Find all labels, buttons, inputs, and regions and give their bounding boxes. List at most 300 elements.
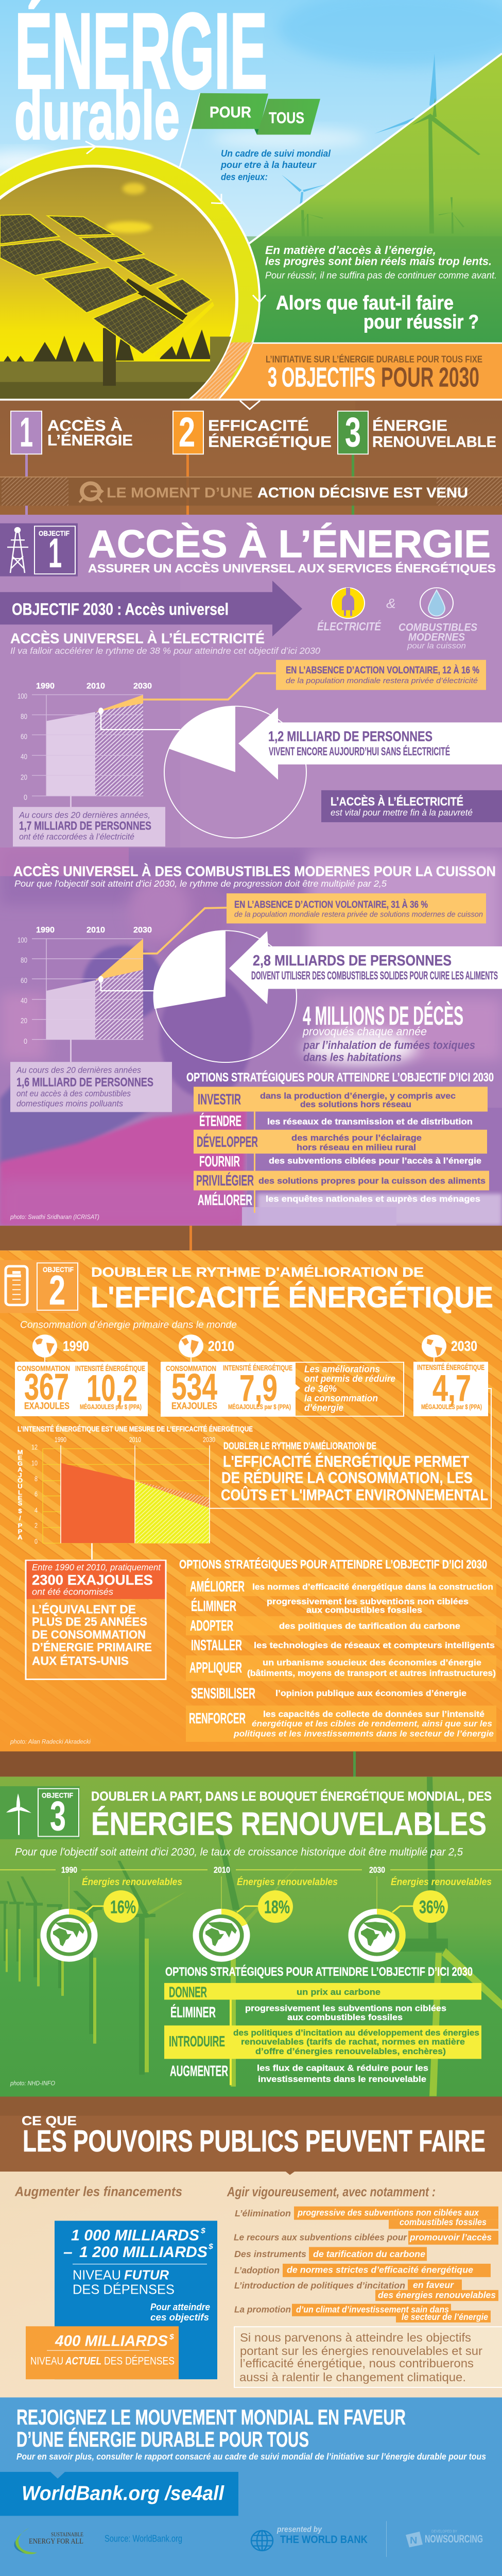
icon: field turbines	[301, 98, 480, 236]
chart: cooking fuels: 20	[21, 1017, 27, 1025]
panel: footer	[0, 2397, 502, 2576]
box: url	[0, 2472, 238, 2516]
table: objective 2 strategies: les technologies de réseaux et compteurs intelligents	[254, 1640, 495, 1650]
table: objective 1 strategies: AMÉLIORER	[198, 1192, 252, 1209]
box: future spending: NIVEAU	[73, 2267, 121, 2282]
label: electricity: ÉLECTRICITÉ	[317, 619, 381, 633]
icon: ring arrows	[85, 141, 266, 302]
year 2010: INTENSITÉ ÉNERGÉTIQUE	[223, 1364, 292, 1372]
strip: decisive moment	[0, 477, 502, 505]
objective 3 tag	[338, 409, 496, 455]
table: objective 1 strategies: hors réseau en milieu rural	[297, 1142, 416, 1152]
panel: three objectives on wood	[0, 401, 502, 515]
label: modern fuels	[399, 621, 477, 650]
timeline: 2030	[369, 1865, 385, 1875]
chart: energy intensity: $	[18, 1507, 22, 1515]
chart: energy intensity: 12	[31, 1444, 38, 1452]
box: 1.6 billion: 1,6 MILLIARD DE PERSONNES	[16, 1075, 153, 1089]
icon: plug	[332, 588, 365, 618]
chart: energy intensity: O	[18, 1477, 23, 1484]
list: actions: d’un climat d’investissement sain dans	[296, 2304, 449, 2314]
list: actions: de normes strictes d’efficacité énergétique	[287, 2264, 473, 2275]
box: electricity vital: est vital pour mettre fin à la pauvreté	[331, 807, 473, 818]
table: objective 3 strategies	[164, 1964, 481, 2085]
chart: cooking fuels: 2030	[133, 926, 152, 935]
table: objective 1 strategies: INVESTIR	[198, 1092, 241, 1108]
headings	[14, 2184, 436, 2199]
box: url: WorldBank.org /se4all	[22, 2482, 224, 2504]
source: Source: WorldBank.org	[105, 2534, 182, 2544]
badge: objective 1: 1	[48, 530, 62, 576]
icon: target	[79, 483, 102, 502]
panel: cooking fuels with photo	[0, 848, 502, 1226]
flag: pour tous: TOUS	[269, 109, 304, 127]
icon: pylon	[7, 528, 28, 573]
table: objective 2 strategies	[179, 1557, 496, 1742]
year 2030: 4,7	[432, 1367, 471, 1409]
chart: energy intensity: 6	[34, 1490, 38, 1498]
label: modern fuels: pour la cuisson	[407, 641, 466, 650]
box: future spending: 1 000 MILLIARDS	[71, 2227, 199, 2244]
box: exajoules saved: ont été économisés	[32, 1586, 113, 1597]
box: 1.7 billion	[13, 807, 165, 846]
heading: join the movement: D’UNE ÉNERGIE DURABLE POUR TOUS	[16, 2428, 309, 2451]
table: objective 3 strategies: renouvelables (tarifs de rachat, normes en matière	[241, 2037, 465, 2046]
objective 1 tag: ACCÈS À	[47, 417, 123, 434]
year 2010: 534	[171, 1366, 217, 1408]
panel: what governments can do heading	[0, 2097, 502, 2172]
box: exajoules saved: AUX ÉTATS-UNIS	[32, 1654, 129, 1668]
heading: 3 objectives: 3 OBJECTIFS	[268, 362, 375, 393]
logo: world bank	[251, 2525, 368, 2551]
list: actions: Des instruments	[234, 2249, 306, 2259]
badge: objective 2: 2	[49, 1267, 65, 1313]
timeline: 2010	[214, 1865, 230, 1875]
chart: cooking fuels: 60	[21, 977, 27, 985]
table: objective 1 strategies: des marchés pour l’éclairage	[291, 1133, 422, 1143]
chart: cooking fuels	[18, 926, 154, 1062]
stat: 4 million deaths: provoqués chaque année	[302, 1025, 427, 1038]
table: objective 3 strategies: progressivement les subventions non ciblées	[245, 2003, 446, 2013]
chart: electricity access: 60	[21, 733, 27, 741]
year 2010: 2010	[208, 1338, 234, 1354]
callout: 2.8 billion	[229, 931, 502, 1004]
table: objective 3 strategies: ÉLIMINER	[170, 2004, 216, 2021]
year 2010: EXAJOULES	[171, 1401, 217, 1412]
year 2010: CONSOMMATION	[166, 1364, 216, 1373]
chart: electricity access: 100	[18, 692, 27, 701]
green diagonal panel	[206, 54, 502, 343]
box: future spending: DES DÉPENSES	[73, 2282, 175, 2297]
box: future spending: 1 200 MILLIARDS	[79, 2243, 207, 2261]
year 1990: MÉGAJOULES par $ (PPA)	[80, 1403, 142, 1411]
yellow ring and photo	[0, 145, 261, 399]
box: electricity vital: L’ACCÈS À L’ÉLECTRICITÉ	[331, 794, 463, 808]
box: 1.6 billion: domestiques moins polluants	[16, 1098, 123, 1108]
table: objective 2 strategies: un urbanisme soucieux des économies d’énergie	[263, 1657, 481, 1667]
flag: pour tous	[192, 93, 320, 134]
box: 1.6 billion	[10, 1062, 172, 1112]
chart: energy intensity	[18, 1425, 253, 1560]
objective 1 tag: 1	[20, 409, 33, 455]
notch	[286, 2172, 295, 2175]
callout: 1.2 billion: 1,2 MILLIARD DE PERSONNES	[268, 728, 432, 744]
chart: energy intensity: L	[18, 1489, 22, 1496]
panel: what governments can do heading: CE QUE	[22, 2113, 77, 2128]
box: current spending: DES DÉPENSES	[104, 2354, 175, 2367]
year 2030: 2030	[451, 1338, 477, 1354]
heading: objective 2	[20, 1264, 493, 1330]
logo: world bank: presented by	[276, 2525, 322, 2534]
wood band 3	[0, 1751, 502, 1777]
table: objective 2 strategies: énergétique et les cibles de rendement, ainsi que sur les	[252, 1719, 492, 1728]
callout: no action electricity: de la population mondiale restera privée d’électricité	[286, 677, 478, 685]
logo: sustainable energy for all	[14, 2528, 83, 2554]
chart: cooking fuels: 2010	[86, 926, 105, 935]
table: objective 3 strategies: d’offre d’énergies renouvelables, enchères)	[255, 2046, 446, 2056]
text: doubling statement: DOUBLER LE RYTHME D'AMÉLIORATION DE	[223, 1440, 376, 1452]
chart: energy intensity: 8	[34, 1475, 38, 1483]
chart: electricity access: 0	[24, 793, 27, 802]
box: current spending: 400 MILLIARDS	[55, 2332, 168, 2349]
chart: energy intensity: /	[19, 1515, 21, 1522]
table: objective 2 strategies: RENFORCER	[189, 1710, 246, 1726]
callout: no action cooking: EN L’ABSENCE D’ACTION VOLONTAIRE, 31 À 36 %	[234, 899, 428, 910]
chart: energy intensity: S	[18, 1500, 22, 1507]
chart: energy intensity: 2030	[203, 1436, 215, 1444]
box: 1.6 billion: Au cours des 20 dernières années	[16, 1065, 141, 1075]
year 1990	[15, 1334, 148, 1416]
table: objective 3 strategies: DONNER	[169, 1985, 207, 2001]
list: actions: Le recours aux subventions ciblées pour	[234, 2232, 407, 2242]
list: actions: La promotion	[234, 2304, 291, 2314]
chart: electricity access: 2010	[86, 682, 105, 690]
ampersand: &	[386, 596, 396, 611]
panel: actions on paper	[0, 2172, 502, 2397]
photo credit: photo: Alan Radecki Akradecki	[10, 1738, 91, 1745]
box: 1.7 billion: 1,7 MILLIARD DE PERSONNES	[19, 820, 151, 833]
heading: question	[276, 292, 479, 333]
year 2010: 7,9	[239, 1367, 278, 1409]
table: objective 2 strategies: politiques et les investissements dans le secteur de l’énergie	[233, 1728, 494, 1739]
strip: decisive moment: ACTION DÉCISIVE EST VENU	[257, 484, 468, 501]
text: progress statement: En matière d’accès à l’énergie,	[265, 244, 436, 257]
subtitle: Un cadre de suivi mondial	[221, 149, 331, 159]
table: objective 1 strategies: DÉVELOPPER	[197, 1133, 258, 1150]
year 2010	[161, 1334, 404, 1417]
box: 1.7 billion: ont été raccordées à l’électricité	[19, 832, 134, 841]
table: objective 2 strategies: les capacités de collecte de données sur l’intensité	[263, 1709, 484, 1719]
chart: energy intensity: 10	[31, 1460, 38, 1467]
list: actions: L’introduction de politiques d’incitation	[234, 2280, 405, 2291]
panel: objective 3	[0, 1777, 502, 2097]
logo: sustainable energy for all: SUSTAINABLE	[51, 2531, 83, 2538]
year 2010: d’énergie	[304, 1403, 343, 1413]
stat: 18 percent	[196, 1876, 338, 1959]
table: objective 2 strategies: les normes d’efficacité énergétique dans la construction	[252, 1582, 493, 1591]
title	[14, 0, 267, 154]
objective 3 tag: ÉNERGIE	[372, 417, 447, 434]
chart: energy intensity: E	[18, 1495, 22, 1502]
chart: cooking fuels: 40	[21, 997, 27, 1005]
box: exajoules saved: D’ÉNERGIE PRIMAIRE	[32, 1640, 152, 1654]
table: objective 1 strategies: dans la production d’énergie, y compris avec	[260, 1091, 456, 1100]
chart: energy intensity: 0	[34, 1538, 38, 1546]
solar panel photo	[0, 181, 231, 399]
chart: energy intensity: A	[18, 1534, 23, 1541]
connector: doubling box	[210, 1388, 491, 1509]
year 2010: de 36%	[304, 1384, 337, 1394]
year 1990: 10,2	[86, 1367, 137, 1409]
year 2010: la consommation	[304, 1394, 378, 1404]
box: future spending: –	[63, 2243, 73, 2261]
table: objective 3 strategies: AUGMENTER	[170, 2063, 228, 2079]
flag: pour tous: POUR	[210, 103, 251, 121]
table: objective 2 strategies: INSTALLER	[191, 1637, 242, 1654]
chart: energy intensity: M	[18, 1449, 23, 1456]
badge: objective 3	[0, 1786, 80, 1839]
table: objective 2 strategies: ÉLIMINER	[191, 1598, 236, 1615]
chart: electricity access: 20	[21, 773, 27, 782]
heading: objective 3	[15, 1789, 492, 1858]
table: objective 3 strategies: INTRODUIRE	[169, 2033, 225, 2050]
trees	[4, 330, 231, 365]
chart: energy intensity: P	[18, 1522, 22, 1530]
box: exajoules saved: 2300 EXAJOULES	[32, 1572, 153, 1588]
year 2010: MÉGAJOULES par $ (PPA)	[228, 1403, 291, 1411]
box: current spending: $	[169, 2333, 174, 2341]
box: exajoules saved: L’ÉQUIVALENT DE	[32, 1602, 136, 1616]
year 1990: EXAJOULES	[24, 1401, 70, 1412]
objective 1 tag	[11, 409, 133, 455]
box: climate statement: portant sur les énergies renouvelables et sur	[240, 2345, 482, 2358]
table: objective 1 strategies: les enquêtes nationales et auprès des ménages	[266, 1194, 480, 1204]
stat: 18 percent: 18%	[264, 1897, 290, 1917]
heading: objective 1: ACCÈS À L’ÉNERGIE	[88, 522, 491, 566]
heading: cooking fuels: Pour que l'objectif soit atteint d'ici 2030, le rythme de progression doit être multiplié par 2,5	[14, 878, 387, 889]
heading: electricity access: ACCÈS UNIVERSEL À L’ÉLECTRICITÉ	[10, 630, 265, 647]
notch	[240, 401, 260, 409]
stat: 18 percent: Énergies renouvelables	[237, 1876, 338, 1888]
badge: objective 1	[0, 523, 78, 577]
table: objective 2 strategies: (bâtiments, moyens de transport et autres infrastructures)	[247, 1668, 496, 1678]
table: objective 1 strategies: ÉTENDRE	[199, 1112, 241, 1129]
table: objective 2 strategies: APPLIQUER	[189, 1660, 242, 1676]
chart: electricity access: 2030	[133, 682, 152, 690]
table: objective 1 strategies	[186, 1070, 494, 1213]
text: progress statement	[265, 244, 497, 281]
table: objective 1 strategies: PRIVILÉGIER	[196, 1172, 254, 1189]
icon: meter	[6, 1266, 27, 1305]
label: modern fuels: COMBUSTIBLES	[399, 621, 477, 633]
heading: join the movement	[16, 2406, 486, 2462]
year 1990: INTENSITÉ ÉNERGÉTIQUE	[75, 1364, 145, 1373]
chart: electricity access: 40	[21, 753, 27, 761]
heading: objective 2: Consommation d’énergie primaire dans le monde	[20, 1319, 237, 1330]
table: objective 1 strategies: FOURNIR	[199, 1154, 240, 1170]
objective 1 tag: L’ÉNERGIE	[47, 432, 133, 449]
flag pole	[179, 93, 200, 169]
box: exajoules saved: PLUS DE 25 ANNÉES	[32, 1615, 147, 1629]
objective 2 tag: 2	[179, 409, 195, 455]
wood band 2	[0, 1226, 502, 1250]
objective 3 tag: 3	[345, 409, 361, 455]
callout: no action cooking	[143, 893, 486, 954]
label: modern fuels: MODERNES	[408, 631, 465, 643]
turbine photo	[0, 1777, 502, 2096]
table: objective 1 strategies: les réseaux de transmission et de distribution	[267, 1116, 473, 1126]
subtitle: des enjeux:	[221, 172, 268, 182]
badge: objective 1: OBJECTIF	[39, 530, 70, 538]
strip: decisive moment: LE MOMENT D’UNE	[107, 485, 253, 501]
list: actions: L’adoption	[234, 2265, 280, 2275]
year 1990: 367	[24, 1366, 69, 1408]
chart: electricity access	[18, 682, 180, 807]
list: actions: de tarification du carbone	[313, 2249, 425, 2259]
stat: 4 million deaths: dans les habitations	[303, 1050, 402, 1063]
objective 2 tag: EFFICACITÉ	[208, 417, 309, 434]
year 1990: 1990	[63, 1338, 89, 1354]
year 2010: ont permis de réduire	[304, 1374, 395, 1384]
box: climate statement	[234, 2327, 502, 2387]
icon: drop	[420, 588, 453, 618]
table: objective 3 strategies: un prix au carbone	[297, 1987, 380, 1997]
badge: objective 3: 3	[50, 1792, 66, 1839]
box: future spending: Pour atteindre	[150, 2302, 210, 2313]
arrow: objectif 2030: OBJECTIF 2030 : Accès universel	[12, 600, 229, 619]
title: durable	[14, 77, 180, 154]
badge: objective 3: OBJECTIF	[42, 1792, 73, 1800]
callout: no action electricity	[143, 660, 486, 700]
arrow: objectif 2030	[0, 581, 302, 636]
pie: people using solid fuels	[153, 930, 297, 1062]
chart: cooking fuels: 1990	[36, 926, 55, 935]
box: current spending: NIVEAU	[30, 2354, 63, 2367]
box: future spending: ces objectifs	[150, 2313, 209, 2323]
list: actions: en faveur	[413, 2280, 454, 2290]
callout: 1.2 billion	[238, 707, 502, 779]
table: objective 1 strategies: des solutions hors réseau	[300, 1099, 411, 1109]
chart: energy intensity: 1990	[55, 1436, 66, 1444]
chart: cooking fuels: 0	[24, 1037, 27, 1046]
headings: Augmenter les financements	[14, 2184, 182, 2199]
box: current spending: ACTUEL	[65, 2354, 101, 2367]
chart: energy intensity: L’INTENSITÉ ÉNERGÉTIQUE EST UNE MESURE DE L’EFFICACITÉ ÉNERGÉTIQUE	[18, 1425, 253, 1433]
logo: sustainable energy for all: ENERGY FOR ALL	[29, 2537, 83, 2546]
box: exajoules saved	[26, 1561, 166, 1679]
table: objective 2 strategies: progressivement les subventions non ciblées	[267, 1597, 469, 1606]
logo: nowsourcing	[406, 2529, 483, 2547]
table: objective 2 strategies: AMÉLIORER	[190, 1578, 245, 1595]
objective 2 tag	[173, 409, 332, 455]
table: objective 2 strategies: des politiques de tarification du carbone	[279, 1621, 460, 1631]
chart: electricity access: 80	[21, 713, 27, 721]
box: climate statement: l’efficacité énergétique, nous contribuerons	[240, 2357, 474, 2370]
table: objective 3 strategies: investissements dans le renouvelable	[258, 2074, 426, 2084]
table: objective 2 strategies: aux combustibles fossiles	[306, 1605, 422, 1615]
timeline: 1990	[61, 1865, 77, 1875]
heading: electricity access: Il va falloir accélérer le rythme de 38 % pour atteindre cet objectif d’ici 2030	[10, 645, 321, 656]
box: future spending: FUTUR	[124, 2267, 169, 2282]
stat: 16 percent: Énergies renouvelables	[82, 1876, 182, 1888]
heading: cooking fuels	[13, 863, 496, 889]
heading: electricity access	[10, 630, 321, 656]
box: future spending: $	[208, 2243, 213, 2251]
list: actions: L’élimination	[235, 2208, 291, 2218]
chart: energy intensity: U	[18, 1483, 23, 1490]
heading: objective 2: DOUBLER LE RYTHME D'AMÉLIORATION DE	[91, 1264, 424, 1280]
box: current spending	[26, 2326, 179, 2379]
box: climate statement: Si nous parvenons à atteindre les objectifs	[240, 2331, 471, 2345]
photo credit: photo: NHD-INFO	[10, 2080, 55, 2087]
list: actions: combustibles fossiles	[400, 2216, 487, 2227]
icon: sky turbines	[282, 54, 437, 210]
badge: objective 2	[0, 1260, 80, 1313]
objective 2 tag: ÉNERGÉTIQUE	[208, 433, 332, 450]
panel: hero	[0, 0, 502, 450]
table: objective 1 strategies: des subventions ciblées pour l’accès à l’énergie	[269, 1156, 481, 1165]
box: future spending: $	[200, 2227, 205, 2235]
stat: 16 percent: 16%	[110, 1897, 136, 1917]
chart: electricity access: 1990	[36, 682, 55, 690]
stat: 4 million deaths	[302, 1001, 475, 1063]
list: actions: le secteur de l’énergie	[402, 2312, 488, 2322]
table: objective 2 strategies: SENSIBILISER	[191, 1686, 255, 1702]
year 2030	[413, 1334, 488, 1416]
box: 1.7 billion: Au cours des 20 dernières années,	[19, 810, 150, 820]
chart: energy intensity: P	[18, 1528, 22, 1535]
stat: 36 percent	[351, 1876, 492, 1959]
box: future spending	[55, 2221, 217, 2379]
box: 1.6 billion: ont eu accès à des combustibles	[16, 1089, 131, 1098]
logo: nowsourcing: N	[410, 2536, 417, 2546]
panel: orange objectives	[206, 344, 502, 399]
chart: cooking fuels: 100	[18, 936, 27, 944]
stat: 36 percent: 36%	[419, 1897, 445, 1917]
heading: question: pour réussir ?	[363, 311, 479, 333]
box: exajoules saved: DE CONSOMMATION	[32, 1629, 146, 1641]
heading: question: Alors que faut-il faire	[276, 292, 454, 314]
headings: Agir vigoureusement, avec notamment :	[227, 2184, 436, 2199]
subtitle	[220, 149, 331, 182]
heading: objective 1: ASSURER UN ACCÈS UNIVERSEL AUX SERVICES ÉNERGÉTIQUES	[88, 562, 496, 575]
subtitle: pour etre à la hauteur	[220, 160, 317, 171]
chart: cooking fuels: 80	[21, 956, 27, 964]
table: objective 3 strategies: les flux de capitaux & réduire pour les	[257, 2063, 428, 2073]
timeline	[0, 1865, 502, 1875]
callout: no action cooking: de la population mondiale restera privée de solutions modernes de cuisson	[234, 910, 483, 919]
chart: energy intensity: 2	[34, 1522, 38, 1530]
chart: energy intensity: A	[18, 1466, 23, 1473]
box: electricity vital	[321, 790, 502, 822]
year 1990: CONSOMMATION	[17, 1364, 70, 1373]
diagonal white rule	[231, 54, 502, 258]
logo: world bank: THE WORLD BANK	[280, 2533, 368, 2546]
chart: energy intensity: 4	[34, 1507, 38, 1515]
callout: 2.8 billion: 2,8 MILLIARDS DE PERSONNES	[253, 953, 452, 969]
chart: energy intensity: G	[18, 1461, 23, 1467]
icon: turbine	[6, 1793, 31, 1835]
photo credit: photo: Swathi Sridharan (ICRISAT)	[10, 1214, 99, 1221]
box: climate statement: aussi à ralentir le changement climatique.	[239, 2371, 466, 2384]
logo: nowsourcing: DEVELOPED BY	[431, 2529, 457, 2534]
text: doubling statement	[221, 1440, 488, 1504]
chart: energy intensity: 2010	[129, 1436, 141, 1444]
table: objective 3 strategies: aux combustibles fossiles	[287, 2012, 403, 2022]
year 2010: Les améliorations	[304, 1364, 380, 1375]
objective stems	[25, 454, 354, 515]
panel: objective 2	[0, 1250, 502, 1751]
